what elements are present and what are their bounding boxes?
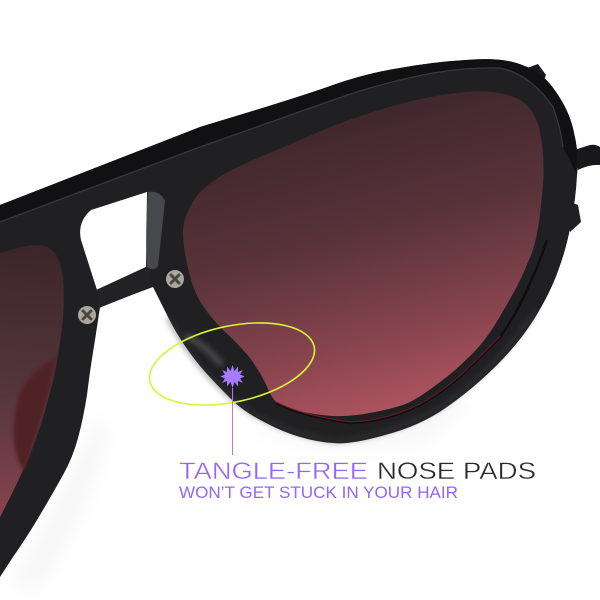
lens: left [0, 245, 64, 517]
frame edge sheen [168, 310, 536, 441]
heading [179, 458, 536, 485]
subheading: WON’T GET STUCK IN YOUR HAIR [179, 484, 458, 502]
callout line [232, 388, 234, 455]
icon: screw left [78, 306, 96, 324]
highlight ellipse [142, 309, 322, 419]
icon: purple star [220, 365, 244, 388]
nose bridge highlight [146, 192, 165, 269]
lens: right [183, 91, 544, 416]
icon: screw right [166, 270, 184, 288]
icon: temple arm and hinges [527, 64, 600, 232]
frame: top dark band [0, 59, 578, 222]
lens: left dark reflection [14, 356, 57, 472]
heading: TANGLE-FREE [179, 458, 368, 485]
heading: NOSE PADS [377, 458, 536, 485]
bridge bar [96, 266, 154, 308]
frame top highlight [0, 68, 563, 222]
soft shadow under frame [10, 400, 480, 590]
nose pad highlight [185, 335, 222, 365]
bridge opening [80, 192, 147, 290]
lens rim: red line [276, 240, 547, 423]
